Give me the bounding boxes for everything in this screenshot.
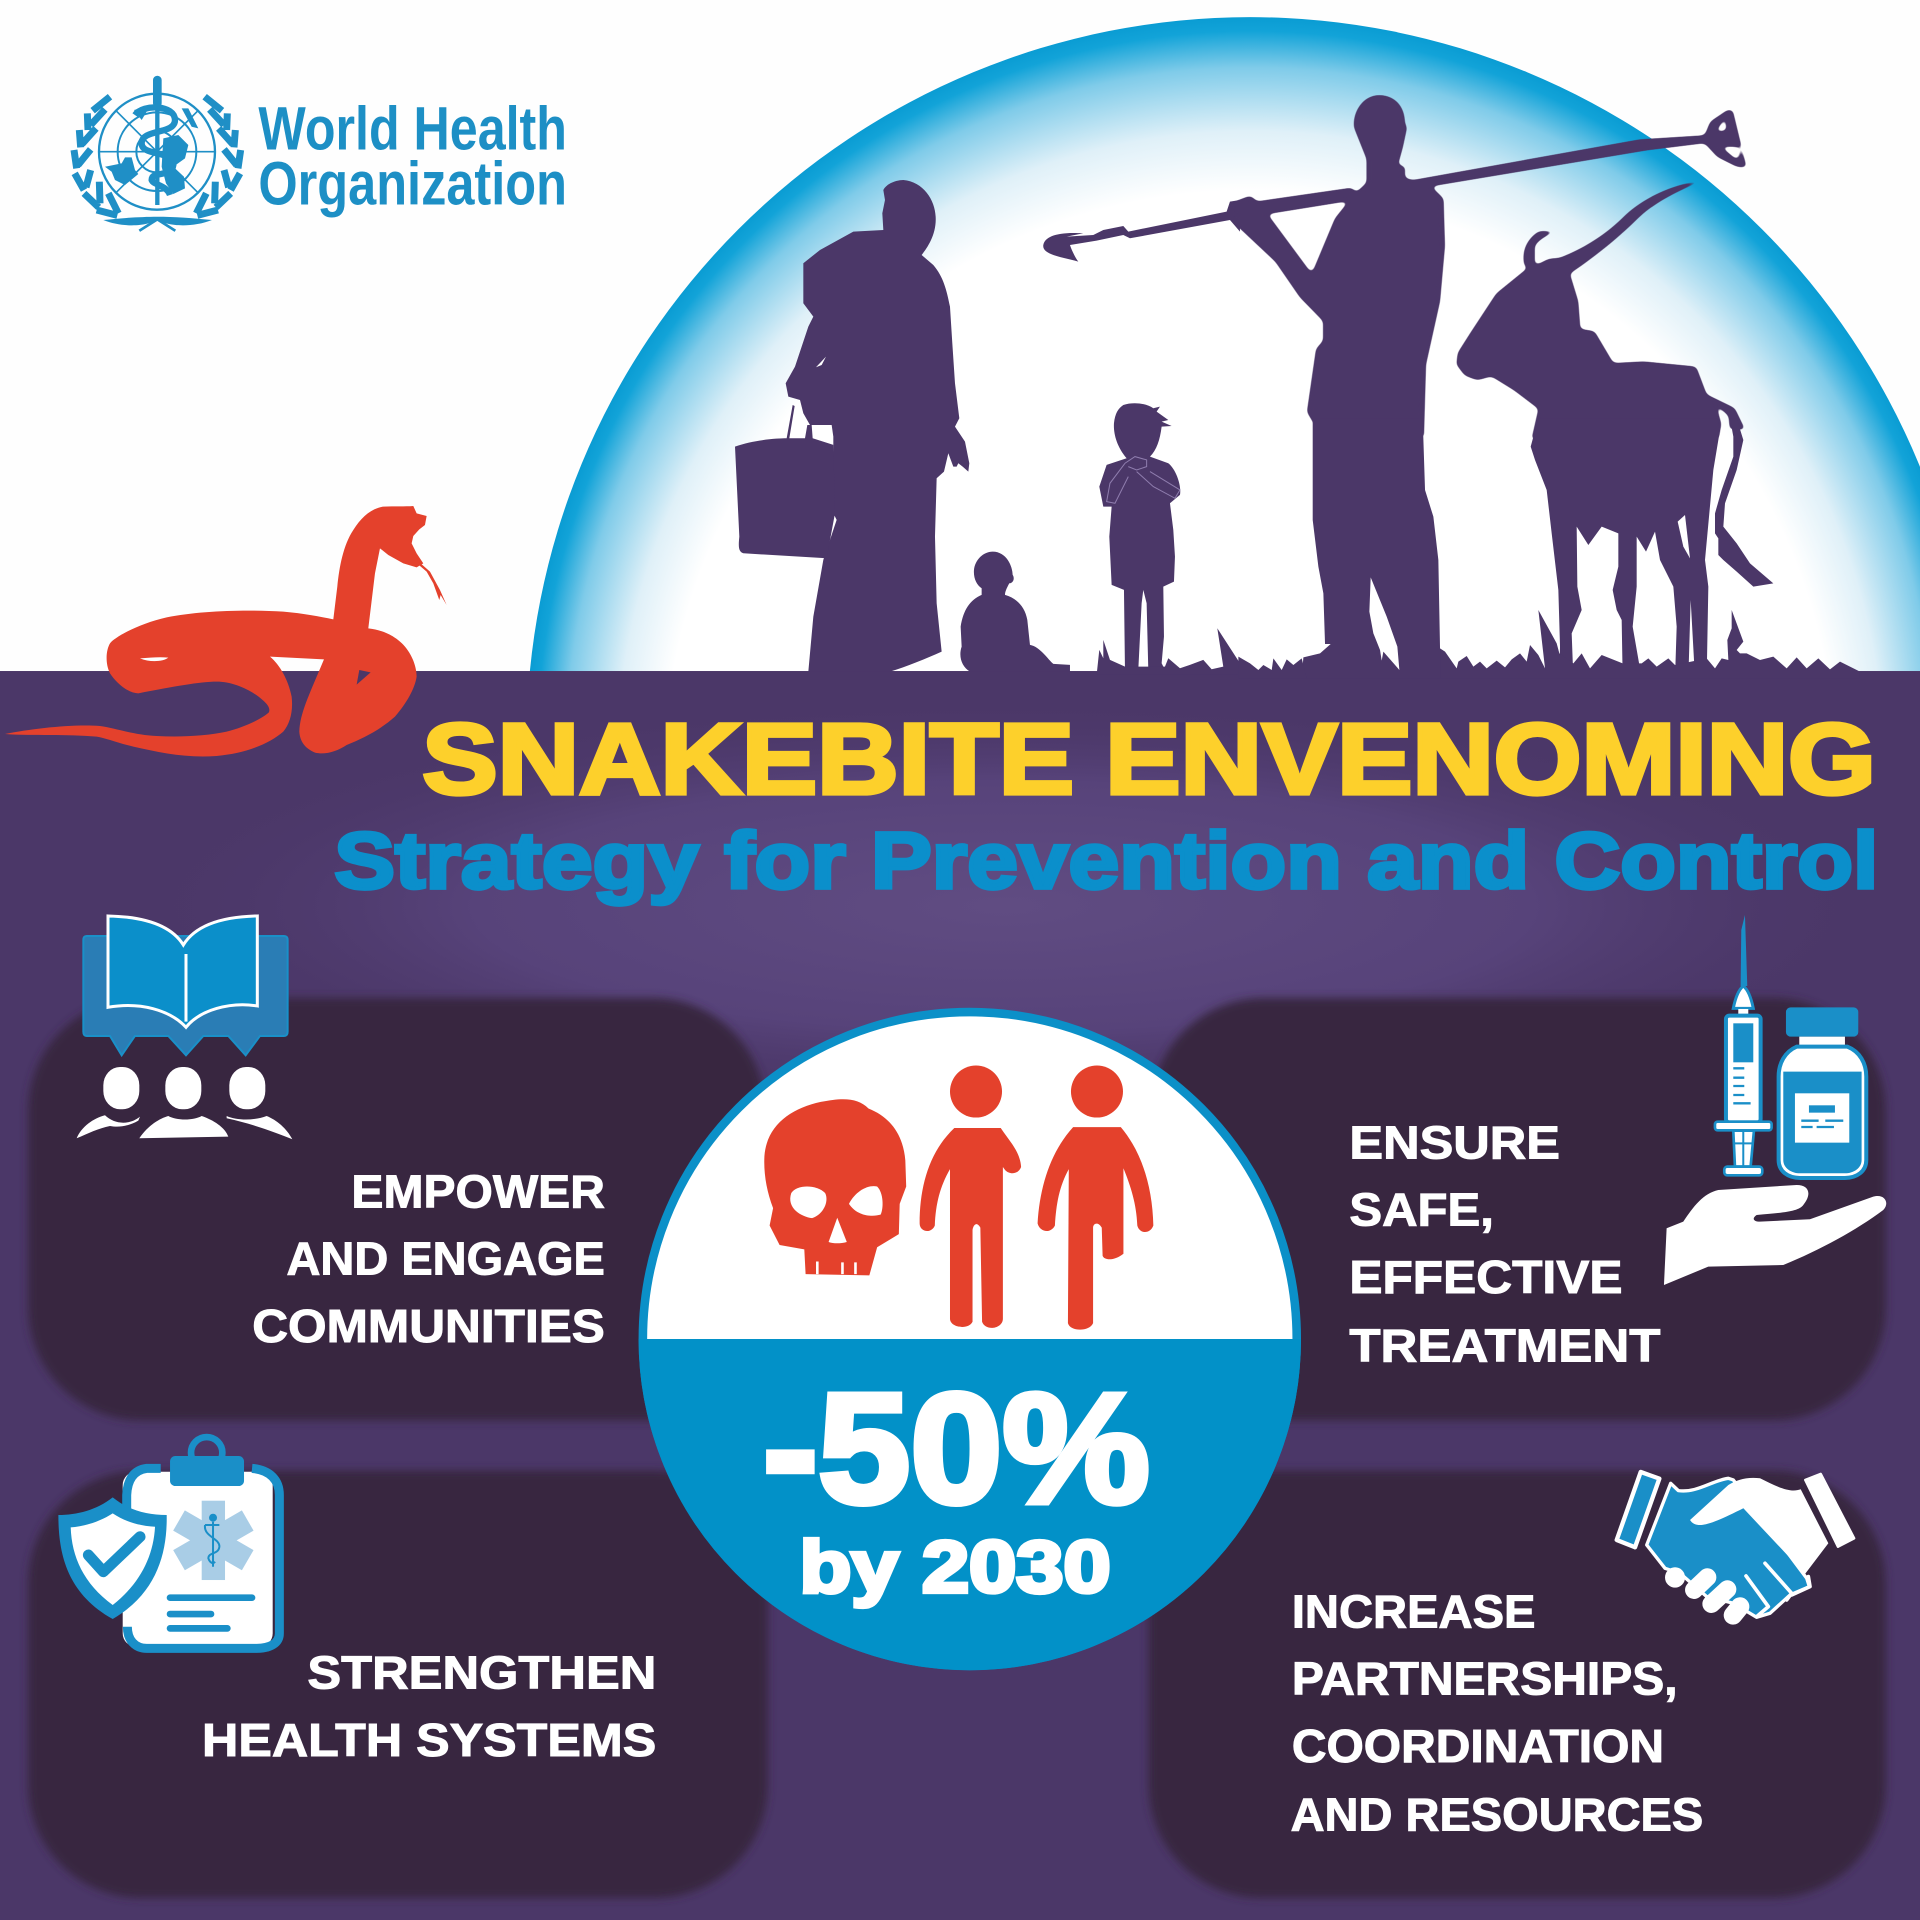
- text: empower and engage communities: [252, 1165, 605, 1352]
- text: strengthen health systems: HEALTH SYSTEMS: [202, 1714, 656, 1766]
- text: strengthen health systems: STRENGTHEN: [307, 1647, 656, 1699]
- shield: [58, 1497, 167, 1619]
- icon: clipboard and shield: [58, 1437, 279, 1648]
- person: arm amputee: [920, 1066, 1021, 1328]
- stat: by 2030: by 2030: [800, 1525, 1111, 1608]
- panel: ensure treatment: [1151, 998, 1886, 1420]
- right cuff: [1805, 1474, 1854, 1547]
- person: leg amputee: [1038, 1066, 1153, 1330]
- text: empower and engage communities: EMPOWER: [351, 1165, 605, 1217]
- object: tool hook: [1043, 200, 1240, 262]
- left hand: [1647, 1478, 1809, 1617]
- detail: gap between cow hind legs: [1678, 515, 1690, 558]
- text: ensure safe effective treatment: ENSURE: [1349, 1116, 1560, 1168]
- snake body: [5, 506, 427, 757]
- title: SNAKEBITE ENVENOMING: [422, 703, 1876, 815]
- detail: gap between man's legs: [1369, 577, 1399, 670]
- clipboard: [123, 1437, 279, 1648]
- silhouette: standing child: [1099, 403, 1180, 670]
- cow tail lower: [1715, 418, 1773, 587]
- cow tail upper: [1707, 394, 1745, 430]
- group: woman, baby and child: [735, 180, 1242, 675]
- text: empower and engage communities: AND ENGAGE: [287, 1233, 605, 1285]
- text: ensure safe effective treatment: SAFE,: [1349, 1184, 1494, 1236]
- open book: [108, 916, 257, 1027]
- dome: blue halo: [530, 17, 1920, 671]
- group: man legs, cow legs and grass: [1238, 418, 1860, 678]
- panel: strengthen health systems: [28, 1471, 768, 1898]
- illustration: family and cow silhouettes: [735, 95, 1860, 678]
- logo text: World Health: World Health: [258, 94, 567, 162]
- icon: handshake: [1617, 1472, 1854, 1617]
- circle white top: [643, 1012, 1297, 1666]
- snake gap: purple: [357, 670, 371, 685]
- group: man and cow upper bodies: [1232, 95, 1747, 440]
- text: increase partnerships coordination and resources: INCREASE: [1292, 1585, 1536, 1637]
- people: [77, 1067, 292, 1139]
- central goal circle: [639, 1008, 1301, 1670]
- icon: WHO emblem: [74, 80, 241, 231]
- silhouette: woman: [786, 180, 969, 672]
- text: increase partnerships coordination and resources: [1291, 1585, 1703, 1841]
- stat: -50%: -50%: [763, 1361, 1150, 1536]
- hand: [1664, 1185, 1886, 1285]
- text: increase partnerships coordination and resources: COORDINATION: [1292, 1720, 1664, 1772]
- silhouette: cow upper body: [1456, 180, 1721, 440]
- icon: syringe, vial and hand: [1664, 915, 1886, 1285]
- left cuff: [1617, 1472, 1659, 1547]
- text: ensure safe effective treatment: TREATMENT: [1349, 1320, 1660, 1372]
- panel: empower communities: [28, 998, 765, 1420]
- fingers: [1675, 1563, 1810, 1617]
- snake tongue: [419, 563, 447, 605]
- syringe: [1715, 915, 1772, 1175]
- logo text: Organization: Organization: [258, 149, 567, 217]
- object: bucket: [735, 405, 835, 558]
- right hand: [1690, 1478, 1828, 1574]
- snake gap: white: [140, 657, 168, 661]
- silhouette: cow legs: [1531, 418, 1720, 678]
- grass near child: [1097, 628, 1242, 675]
- vial: [1779, 1007, 1866, 1178]
- text: empower and engage communities: COMMUNITIES: [252, 1300, 605, 1352]
- subtitle: Strategy for Prevention and Control: [334, 816, 1878, 905]
- detail: child arm outlines: [1107, 457, 1180, 503]
- background: white sky: [0, 0, 1920, 671]
- text: strengthen health systems: [202, 1647, 656, 1766]
- background glow behind subtitle: [122, 698, 1920, 1114]
- silhouette: man legs: [1302, 418, 1453, 678]
- silhouette: man upper body: [1232, 95, 1445, 438]
- speech bubble: [83, 936, 288, 1055]
- panel: increase partnerships: [1149, 1471, 1886, 1898]
- book spine: [181, 954, 190, 1022]
- skull: [764, 1099, 906, 1275]
- text: increase partnerships coordination and resources: PARTNERSHIPS,: [1292, 1653, 1678, 1705]
- object: tool pole and head: [1254, 110, 1747, 215]
- logo: World Health Organization: [74, 80, 567, 231]
- text: ensure safe effective treatment: [1349, 1116, 1660, 1372]
- text: ensure safe effective treatment: EFFECTIVE: [1349, 1251, 1622, 1303]
- ground: purple panel background: [0, 671, 1920, 1920]
- circle blue bottom: [638, 1339, 1301, 1670]
- detail: arm gap: [816, 357, 826, 367]
- grass: [1238, 610, 1860, 678]
- icon: skull and people: [764, 1066, 1153, 1330]
- icon: book and community: [77, 916, 292, 1139]
- silhouette: seated baby: [960, 552, 1070, 672]
- text: increase partnerships coordination and resources: AND RESOURCES: [1291, 1789, 1703, 1841]
- snake: [5, 506, 447, 757]
